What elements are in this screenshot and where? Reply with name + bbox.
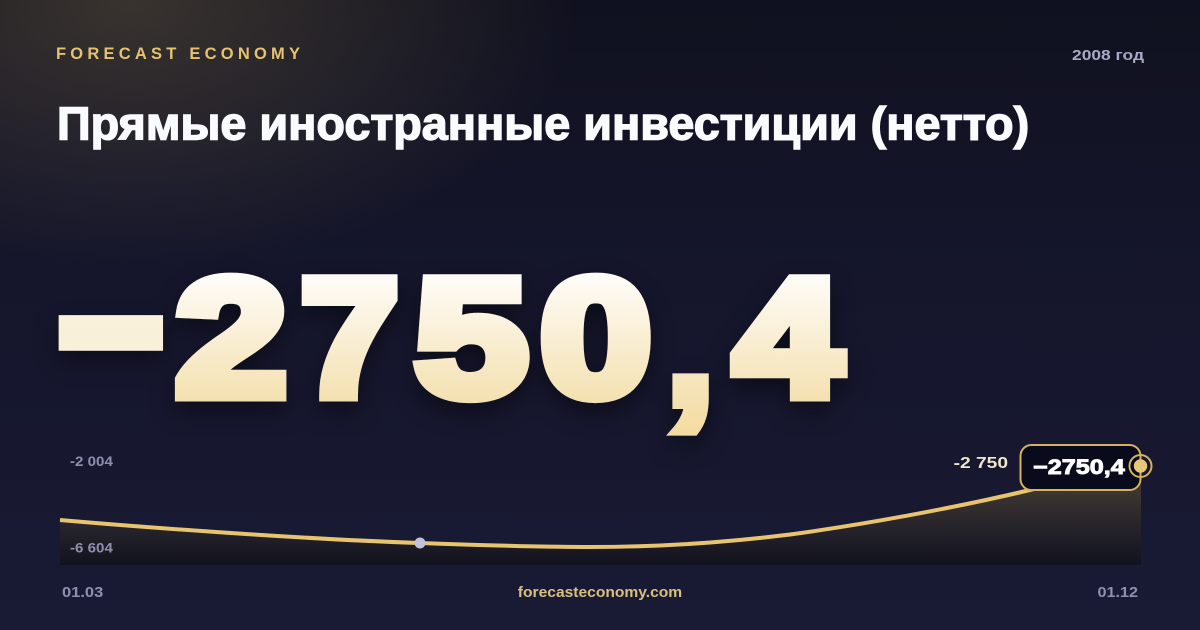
- title: Прямые иностранные инвестиции (нетто): [57, 98, 1029, 149]
- main value: 5: [415, 246, 527, 431]
- value badge: −2750,4: [1033, 455, 1125, 479]
- area under line: [60, 465, 1141, 565]
- main value: ,: [665, 249, 716, 441]
- main value: 0: [541, 244, 651, 430]
- main value: −: [50, 147, 172, 510]
- main value: 2: [176, 245, 287, 430]
- value badge: [1020, 445, 1140, 490]
- source url: forecasteconomy.com: [518, 584, 682, 601]
- axis label: min: -6 604: [70, 541, 114, 556]
- end date: 01.12: [1097, 585, 1138, 601]
- sparkline chart: [60, 465, 1141, 565]
- main value: 7: [301, 246, 398, 431]
- brand label: FORECAST ECONOMY: [56, 45, 300, 63]
- main value: [50, 147, 841, 510]
- current value label: -2 750: [954, 454, 1008, 472]
- minimum marker: [414, 538, 426, 548]
- main value: 4: [734, 246, 841, 431]
- line: [60, 485, 1050, 547]
- axis label: max: -2 004: [70, 454, 114, 470]
- year label: 2008 год: [1072, 47, 1144, 64]
- start date: 01.03: [62, 585, 103, 601]
- end point marker: [1130, 455, 1152, 477]
